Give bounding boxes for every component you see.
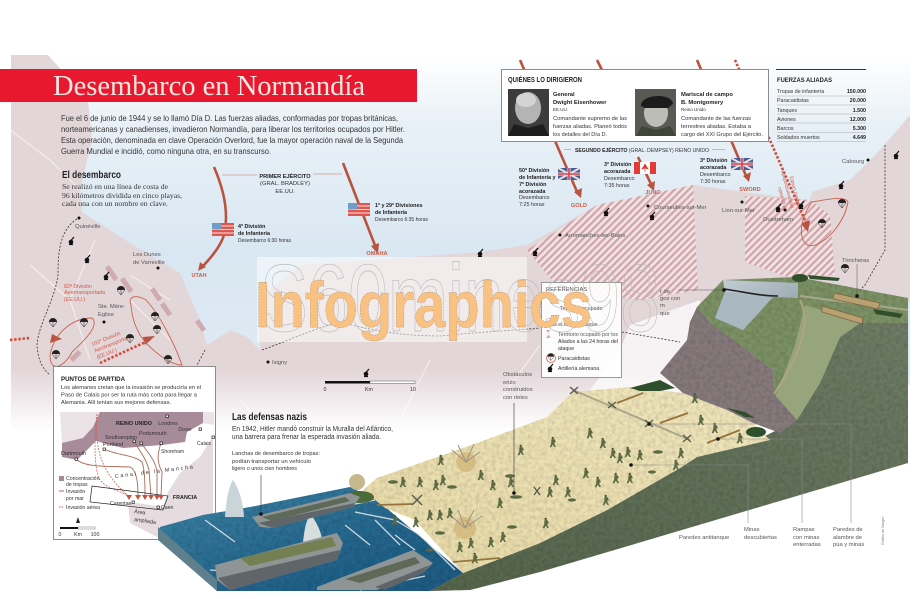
inset map: Calais bbox=[197, 441, 211, 447]
inset map: Londres bbox=[158, 421, 178, 427]
heading and text: las defensas nazis: una barrera para frenar la esperada invasión aliada. bbox=[232, 434, 381, 441]
flag: Canada bbox=[634, 162, 656, 174]
callout: nidos: r de bbox=[660, 289, 670, 295]
label: primer ejército bbox=[222, 172, 342, 195]
text: 3a division Juno bbox=[604, 162, 635, 189]
inset map: Shoreham bbox=[161, 449, 184, 455]
inset legend: Invasión aérea bbox=[66, 505, 100, 511]
map place labels and dots: Quinéville bbox=[75, 224, 100, 230]
text: 1a y 29a divisiones: 1ª y 29ª Divisiones bbox=[375, 203, 422, 209]
green plateau bbox=[687, 277, 908, 420]
bunker bbox=[715, 280, 798, 330]
callout: rampas: con minas bbox=[793, 535, 820, 541]
intro paragraph: Guerra Mundial e incidió, como ninguna otra, en su transcurso. bbox=[61, 147, 271, 156]
box: puntos de partida: Alemania. Allí tenían sus mejores defensas. bbox=[61, 400, 171, 406]
label: primer ejército: EE.UU. bbox=[275, 189, 295, 195]
table: fuerzas aliadas: Barcos bbox=[777, 126, 794, 132]
inset legend: de tropas bbox=[66, 482, 88, 488]
map land: Normandy coast bbox=[10, 55, 910, 470]
text: 50a division: 50ª División bbox=[519, 168, 549, 174]
callout: minas descubiertas bbox=[629, 463, 777, 541]
label: segundo ejército: SEGUNDO EJÉRCITO (GRAL. DEMPSEY) REINO UNIDO bbox=[575, 146, 709, 154]
callout: rampas: enterradas bbox=[793, 542, 821, 548]
red rotated label: division aerotransportada bbox=[773, 168, 802, 210]
map place labels and dots bbox=[64, 158, 870, 366]
text: 3a division Sword: 7:30 horas bbox=[700, 179, 726, 185]
table: fuerzas aliadas: 150.000 bbox=[847, 89, 866, 95]
text: 1a y 29a divisiones bbox=[375, 203, 428, 223]
table: fuerzas aliadas: Aviones bbox=[777, 117, 796, 123]
callout: trincheras: Trincheras bbox=[842, 258, 869, 264]
map place labels and dots: 101ª División bbox=[91, 331, 122, 348]
box: quiénes lo dirigieron bbox=[502, 70, 768, 142]
table: fuerzas aliadas: 20.000 bbox=[850, 98, 866, 104]
text: Eisenhower: EE.UU. bbox=[553, 107, 568, 112]
tan-green slope bbox=[775, 305, 860, 420]
text: Eisenhower: General bbox=[553, 92, 575, 98]
map place labels and dots: Les Dunes bbox=[133, 252, 161, 258]
beach names: SWORD bbox=[739, 187, 761, 193]
box: puntos de partida: Paso de Calais por ser la ruta más corta para llegar a bbox=[61, 392, 198, 398]
beach names: GOLD bbox=[571, 203, 587, 209]
flag: UK Gold bbox=[558, 168, 580, 180]
text: 4a division: Desembarco 6:30 horas bbox=[238, 238, 291, 244]
text: 4a division bbox=[238, 224, 291, 244]
text: 4a division: 4ª División bbox=[238, 224, 265, 230]
callout: trincheras bbox=[842, 258, 869, 298]
beach obstacles bbox=[377, 387, 740, 562]
map scale bbox=[324, 381, 416, 393]
text: 3a division Sword: Desembarco bbox=[700, 172, 731, 178]
table: fuerzas aliadas bbox=[776, 70, 866, 142]
red airborne zones bbox=[50, 198, 848, 366]
beach names: JUNO bbox=[645, 190, 661, 196]
text: Eisenhower: Comandante supremo de las bbox=[553, 116, 627, 122]
flag: USA Utah bbox=[212, 223, 234, 236]
box: puntos de partida bbox=[54, 366, 216, 540]
inset map: Carentan bbox=[110, 501, 131, 507]
inset map: Dartmouth bbox=[61, 451, 86, 457]
beach sand bbox=[363, 387, 770, 573]
rocky cliff bbox=[660, 307, 797, 433]
table: fuerzas aliadas: Paracaidistas bbox=[777, 98, 809, 104]
text: 1a y 29a divisiones: de Infantería bbox=[375, 210, 408, 216]
callout: paredes de alambre: Paredes de bbox=[833, 527, 863, 533]
beach names: UTAH bbox=[191, 273, 207, 279]
legend box: referencias: tras el día del ataque bbox=[548, 322, 598, 328]
callout: minas descubiertas: descubiertas bbox=[744, 535, 777, 541]
text: 4a division: de Infantería bbox=[238, 231, 271, 237]
text: Eisenhower: los detalles del Día D. bbox=[553, 132, 607, 138]
trenches bbox=[822, 293, 880, 324]
sea block bbox=[158, 487, 463, 591]
box: puntos de partida: PUNTOS DE PARTIDA bbox=[61, 376, 125, 383]
callout: obstáculos erizo bbox=[503, 372, 533, 495]
callout: lanchas de desembarco bbox=[232, 451, 320, 472]
map place labels and dots: Cabourg bbox=[842, 159, 864, 165]
text: Eisenhower bbox=[553, 92, 627, 138]
intro paragraph bbox=[61, 114, 405, 156]
intro paragraph: Esta operación, denominada en clave Operación Overlord, fue la mayor operación naval de la Segunda bbox=[61, 136, 403, 145]
label: primer ejército: (GRAL. BRADLEY) bbox=[260, 181, 310, 187]
text: 3a division Juno: acorazada bbox=[604, 169, 631, 175]
assault arrows bbox=[10, 60, 807, 363]
legend box: referencias: Paracaidistas bbox=[558, 356, 590, 362]
callout: paredes de alambre: alambre de bbox=[833, 535, 862, 541]
heading and text: las defensas nazis: Las defensas nazis bbox=[232, 411, 307, 423]
text: 3a division Sword bbox=[700, 158, 731, 185]
intro paragraph: Fue el 6 de junio de 1944 y se lo llamó Día D. Las fuerzas aliadas, conformadas por tropas británicas, bbox=[61, 114, 398, 123]
text: 50a division: 7ª División bbox=[519, 182, 546, 188]
callout: obstáculos erizo: construidos bbox=[503, 387, 533, 393]
explosions bbox=[225, 444, 482, 542]
beach names bbox=[191, 187, 761, 279]
flag: UK Sword bbox=[731, 158, 753, 170]
icons: paratroopers bbox=[49, 199, 849, 364]
heading and text: el desembarco: cada una con un nombre en clave. bbox=[62, 199, 168, 208]
text: Eisenhower: fuerzas aliadas. Planeó todos bbox=[553, 124, 627, 130]
callout: rampas bbox=[716, 437, 821, 548]
heading and text: las defensas nazis: En 1942, Hitler mandó construir la Muralla del Atlántico, bbox=[232, 426, 393, 433]
table: fuerzas aliadas: Tanques bbox=[777, 108, 797, 114]
text: 3a division Juno: Desembarco bbox=[604, 176, 635, 182]
heading and text: el desembarco: Se realizó en una línea de costa de bbox=[62, 182, 169, 191]
callout: obstáculos erizo: Obstáculos bbox=[503, 372, 532, 378]
inset map: FRANCIA bbox=[173, 495, 197, 501]
map scale: 10 bbox=[410, 387, 416, 393]
inset scale: 100 bbox=[91, 532, 99, 538]
red rotated label: division aerotransportada: Aerotransportada bbox=[780, 170, 796, 209]
text: Montgomery: Reino Unido bbox=[681, 107, 706, 112]
box: quiénes lo dirigieron: QUIÉNES LO DIRIGIERON bbox=[508, 75, 582, 84]
inset map: Portsmouth bbox=[139, 431, 167, 437]
dashed front lines bbox=[37, 145, 885, 375]
box: puntos de partida: Los alemanes creían que la invasión se produciría en el bbox=[61, 385, 201, 391]
legend box: referencias: Aliados a las 24 horas del bbox=[558, 339, 618, 345]
map place labels and dots: de Varreville bbox=[133, 260, 165, 266]
label: primer ejército: PRIMER EJÉRCITO bbox=[259, 172, 311, 180]
inset map: Caen bbox=[161, 505, 174, 511]
landing craft 1 bbox=[252, 493, 360, 528]
map place labels and dots: (EE.UU.) bbox=[64, 297, 85, 303]
map place labels and dots: (EE.UU.) bbox=[96, 347, 118, 361]
inset map bbox=[60, 412, 214, 537]
callout: nidos: gos con bbox=[660, 296, 680, 302]
inset map: Canal de la Mancha bbox=[115, 464, 195, 480]
inset legend: Concentración bbox=[66, 476, 100, 482]
inset legend: Invasión bbox=[66, 489, 85, 495]
inset legend: por mar bbox=[66, 496, 84, 502]
callout: paredes de alambre: púa y minas bbox=[833, 542, 864, 548]
red rotated label: division aerotransportada: (Reino Unido) bbox=[788, 175, 802, 207]
callout: obstáculos erizo: con rieles bbox=[503, 395, 528, 401]
heading and text: las defensas nazis bbox=[232, 411, 393, 441]
table: fuerzas aliadas: 1.500 bbox=[853, 108, 866, 114]
legend box: referencias: Territorio ocupado por los bbox=[558, 332, 618, 338]
callout: paredes de alambre bbox=[647, 422, 864, 548]
credit: Gráfico de Sangre bbox=[881, 517, 885, 545]
intro paragraph: norteamericanas y canadienses, invadieron Normandía, para liberar los territorios ocupados por Hitler. bbox=[61, 125, 405, 134]
landing craft 3 bbox=[317, 550, 433, 590]
soldiers on the beach bbox=[388, 393, 743, 563]
table: fuerzas aliadas: 12.000 bbox=[850, 117, 866, 123]
text: Eisenhower: Dwight Eisenhower bbox=[553, 100, 607, 106]
inset map: Área bbox=[134, 508, 146, 517]
occupied territory hatch bbox=[70, 185, 835, 362]
map scale: Km bbox=[365, 387, 374, 393]
vegetation bbox=[346, 274, 903, 503]
text: 50a division: 7:25 horas bbox=[519, 202, 545, 208]
table: fuerzas aliadas: 5.300 bbox=[853, 126, 866, 132]
text: 50a division bbox=[519, 168, 556, 208]
photo: Montgomery bbox=[635, 89, 676, 136]
text: Montgomery: Comandante de las fuerzas bbox=[681, 116, 751, 122]
text: 50a division: de Infantería y bbox=[519, 175, 556, 181]
map place labels and dots: Ste. Mère- bbox=[98, 304, 125, 310]
map place labels and dots: Ouistreham bbox=[763, 217, 793, 223]
text: 1a y 29a divisiones: Desembarco 6:35 horas bbox=[375, 217, 428, 223]
map place labels and dots: Eglise bbox=[98, 312, 114, 318]
inset map: Portland bbox=[103, 442, 123, 448]
hillside bbox=[430, 323, 908, 591]
table: fuerzas aliadas: FUERZAS ALIADAS bbox=[777, 77, 833, 84]
text: Montgomery: terrestres aliadas. Estaba a bbox=[681, 124, 752, 130]
legend box: referencias: Artillería alemana bbox=[558, 366, 599, 372]
text: 3a division Juno: 3ª División bbox=[604, 162, 631, 168]
legend box: referencias bbox=[542, 282, 622, 378]
text: 50a division: Desembarco bbox=[519, 195, 550, 201]
text: Montgomery: Mariscal de campo bbox=[681, 92, 733, 98]
text: 3a division Juno: 7:35 horas bbox=[604, 183, 630, 189]
map place labels and dots: Courseulles-sur-Mer bbox=[654, 205, 707, 211]
callout: lanchas de desembarco: Lanchas de desembarco de tropas: bbox=[232, 451, 320, 457]
legend box: referencias: ataque bbox=[558, 346, 574, 352]
heading and text: el desembarco: 96 kilómetros dividida en cinco playas, bbox=[62, 191, 182, 200]
legend box: referencias: REFERENCIAS bbox=[546, 287, 587, 293]
inset map: Dover bbox=[178, 427, 192, 433]
watermark: S60mines98 bbox=[260, 245, 660, 352]
text: Montgomery: cargo del XXI Grupo del Ejército. bbox=[681, 132, 763, 138]
red rotated label: division aerotransportada: 6ª División bbox=[777, 186, 789, 210]
table: fuerzas aliadas: 4.649 bbox=[853, 135, 866, 141]
map scale: 0 bbox=[324, 387, 327, 393]
inset map: Southampton bbox=[105, 435, 137, 441]
title banner bbox=[0, 69, 417, 102]
text: Montgomery: B. Montgomery bbox=[681, 100, 724, 106]
inset map: REINO UNIDO bbox=[116, 421, 152, 427]
text: 3a division Sword: acorazada bbox=[700, 165, 727, 171]
title banner: Desembarco en Normandía bbox=[53, 71, 366, 102]
map place labels and dots: Isigny bbox=[272, 360, 287, 366]
text: 50a division: acorazada bbox=[519, 189, 546, 195]
callout: nidos: que bbox=[660, 311, 670, 317]
arrow heads bbox=[50, 172, 810, 345]
text: Montgomery bbox=[681, 92, 763, 138]
icons: german artillery bbox=[69, 151, 899, 376]
callout: nidos: m bbox=[660, 303, 665, 309]
callout: lanchas leader bbox=[259, 475, 263, 516]
legend box: referencias: Territorio ocupado bbox=[560, 306, 602, 312]
flag: USA Omaha bbox=[348, 203, 370, 216]
diorama: coastal cross-section bbox=[158, 274, 908, 591]
background sea bbox=[10, 55, 910, 385]
map place labels and dots: Aerotransportada bbox=[64, 290, 105, 296]
heading and text: el desembarco bbox=[62, 169, 182, 208]
callout: nidos bbox=[660, 288, 726, 317]
beach names: OMAHA bbox=[366, 251, 388, 257]
callout: rampas: Rampas bbox=[793, 527, 815, 533]
table: fuerzas aliadas: Soldados muertos bbox=[777, 135, 820, 141]
inset scale: 0 bbox=[59, 532, 62, 538]
map place labels and dots: Arromanches-les-Bains bbox=[565, 233, 625, 239]
map place labels and dots: 82ª División bbox=[64, 284, 92, 290]
callout: lanchas de desembarco: podían transportar un vehículo bbox=[232, 459, 312, 465]
inset legend bbox=[59, 476, 100, 511]
callout: minas descubiertas: Minas bbox=[744, 527, 760, 533]
callout: obstáculos erizo: erizo bbox=[503, 380, 516, 386]
heading and text: el desembarco: El desembarco bbox=[62, 169, 121, 181]
watermark: Infographics bbox=[255, 268, 592, 341]
map place labels and dots: Aerotransportada bbox=[93, 334, 134, 354]
landing craft 2 bbox=[215, 533, 343, 590]
inset map: ampliada bbox=[134, 517, 156, 526]
text: 3a division Sword: 3ª División bbox=[700, 158, 727, 164]
map place labels and dots: Lion-sur-Mer bbox=[722, 208, 755, 214]
photo: Eisenhower bbox=[508, 89, 549, 136]
table: fuerzas aliadas: Tropas de infantería bbox=[777, 89, 824, 95]
inset scale bbox=[59, 517, 99, 538]
inset scale: Km bbox=[74, 532, 82, 538]
callout: paredes antitanque: Paredes antitanque bbox=[679, 535, 729, 541]
land fade bbox=[0, 370, 920, 430]
callout: lanchas de desembarco: ligero o unos cien hombres bbox=[232, 466, 297, 472]
